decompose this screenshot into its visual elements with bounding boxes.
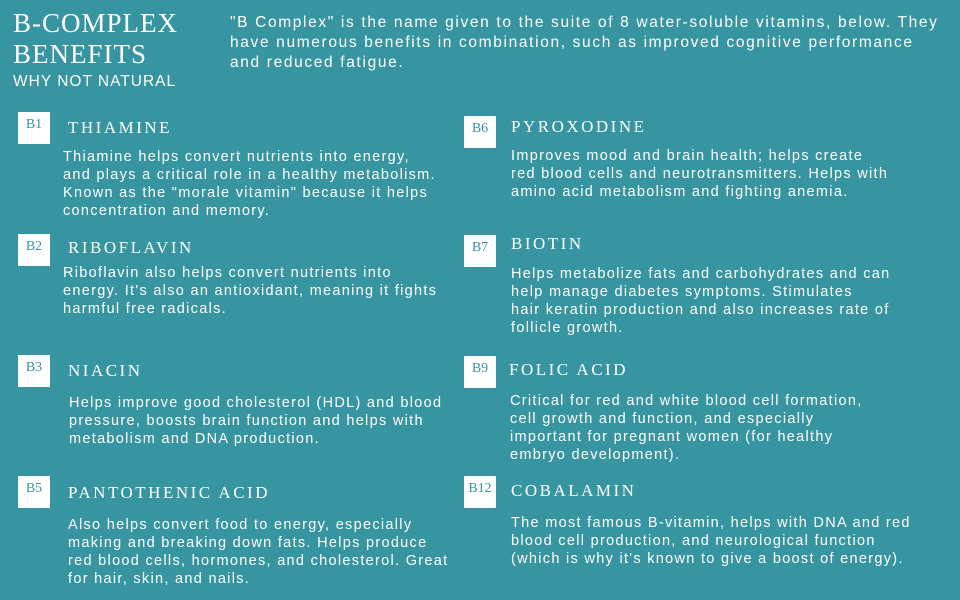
badge B2: B2	[26, 239, 42, 254]
text B2	[63, 265, 437, 317]
badge B9: B9	[472, 361, 488, 376]
text B12: (which is why it's known to give a boost of energy).	[511, 551, 904, 567]
heading B12: COBALAMIN	[511, 481, 636, 500]
text B5: red blood cells, hormones, and cholesterol. Great	[68, 553, 448, 569]
text B3: pressure, boosts brain function and helps with	[69, 413, 424, 429]
badge B12: B12	[468, 481, 492, 496]
badge B7: B7	[472, 240, 488, 255]
text B1: concentration and memory.	[63, 203, 270, 219]
heading B3: NIACIN	[68, 361, 142, 380]
text B3	[69, 395, 442, 447]
text B2: energy. It's also an antioxidant, meaning it fights	[63, 283, 437, 299]
text B9: Critical for red and white blood cell formation,	[510, 393, 863, 409]
text B7: hair keratin production and also increases rate of	[511, 302, 890, 318]
heading B6: PYROXODINE	[511, 117, 646, 136]
subtitle: WHY NOT NATURAL	[13, 73, 176, 90]
heading B1: THIAMINE	[68, 118, 172, 137]
text B1	[63, 149, 436, 219]
text B9	[510, 393, 863, 463]
text B6: Improves mood and brain health; helps create	[511, 148, 863, 164]
text B5: Also helps convert food to energy, especially	[68, 517, 412, 533]
heading B2: RIBOFLAVIN	[68, 238, 194, 257]
intro text: and reduced fatigue.	[230, 54, 404, 71]
text B3: metabolism and DNA production.	[69, 431, 320, 447]
text B2: Riboflavin also helps convert nutrients into	[63, 265, 392, 281]
text B5: making and breaking down fats. Helps produce	[68, 535, 427, 551]
badge B2	[18, 234, 50, 266]
text B6: amino acid metabolism and fighting anemia.	[511, 184, 849, 200]
text B1: Thiamine helps convert nutrients into energy,	[63, 149, 410, 165]
badge B1	[18, 112, 50, 144]
badge B3	[18, 355, 50, 387]
text B3: Helps improve good cholesterol (HDL) and blood	[69, 395, 442, 411]
badge B9	[464, 356, 496, 388]
text B7: follicle growth.	[511, 320, 624, 336]
text B2: harmful free radicals.	[63, 301, 227, 317]
title: BENEFITS	[13, 39, 147, 69]
badge B5	[18, 476, 50, 508]
badge B5: B5	[26, 481, 42, 496]
text B5: for hair, skin, and nails.	[68, 571, 250, 587]
text B12: blood cell production, and neurological function	[511, 533, 876, 549]
badge B7	[464, 235, 496, 267]
heading B7: BIOTIN	[511, 234, 584, 253]
intro text	[230, 14, 939, 71]
text B9: cell growth and function, and especially	[510, 411, 814, 427]
intro text: "B Complex" is the name given to the suite of 8 water-soluble vitamins, below. They	[230, 14, 939, 31]
heading B5: PANTOTHENIC ACID	[68, 483, 270, 502]
text B7: help manage diabetes symptoms. Stimulates	[511, 284, 853, 300]
text B6: red blood cells and neurotransmitters. Helps with	[511, 166, 888, 182]
text B12	[511, 515, 911, 567]
text B1: and plays a critical role in a healthy metabolism.	[63, 167, 436, 183]
text B1: Known as the "morale vitamin" because it helps	[63, 185, 428, 201]
badge B12	[464, 476, 496, 508]
badge B3: B3	[26, 360, 42, 375]
text B12: The most famous B-vitamin, helps with DNA and red	[511, 515, 911, 531]
text B6	[511, 148, 888, 200]
text B9: embryo development).	[510, 447, 680, 463]
intro text: have numerous benefits in combination, such as improved cognitive performance	[230, 34, 914, 51]
text B5	[68, 517, 448, 587]
title	[13, 8, 178, 69]
text B7	[511, 266, 890, 336]
heading B9: FOLIC ACID	[509, 360, 628, 379]
badge B6: B6	[472, 121, 488, 136]
badge B1: B1	[26, 117, 42, 132]
text B7: Helps metabolize fats and carbohydrates and can	[511, 266, 890, 282]
text B9: important for pregnant women (for healthy	[510, 429, 833, 445]
title: B-COMPLEX	[13, 8, 178, 38]
badge B6	[464, 116, 496, 148]
